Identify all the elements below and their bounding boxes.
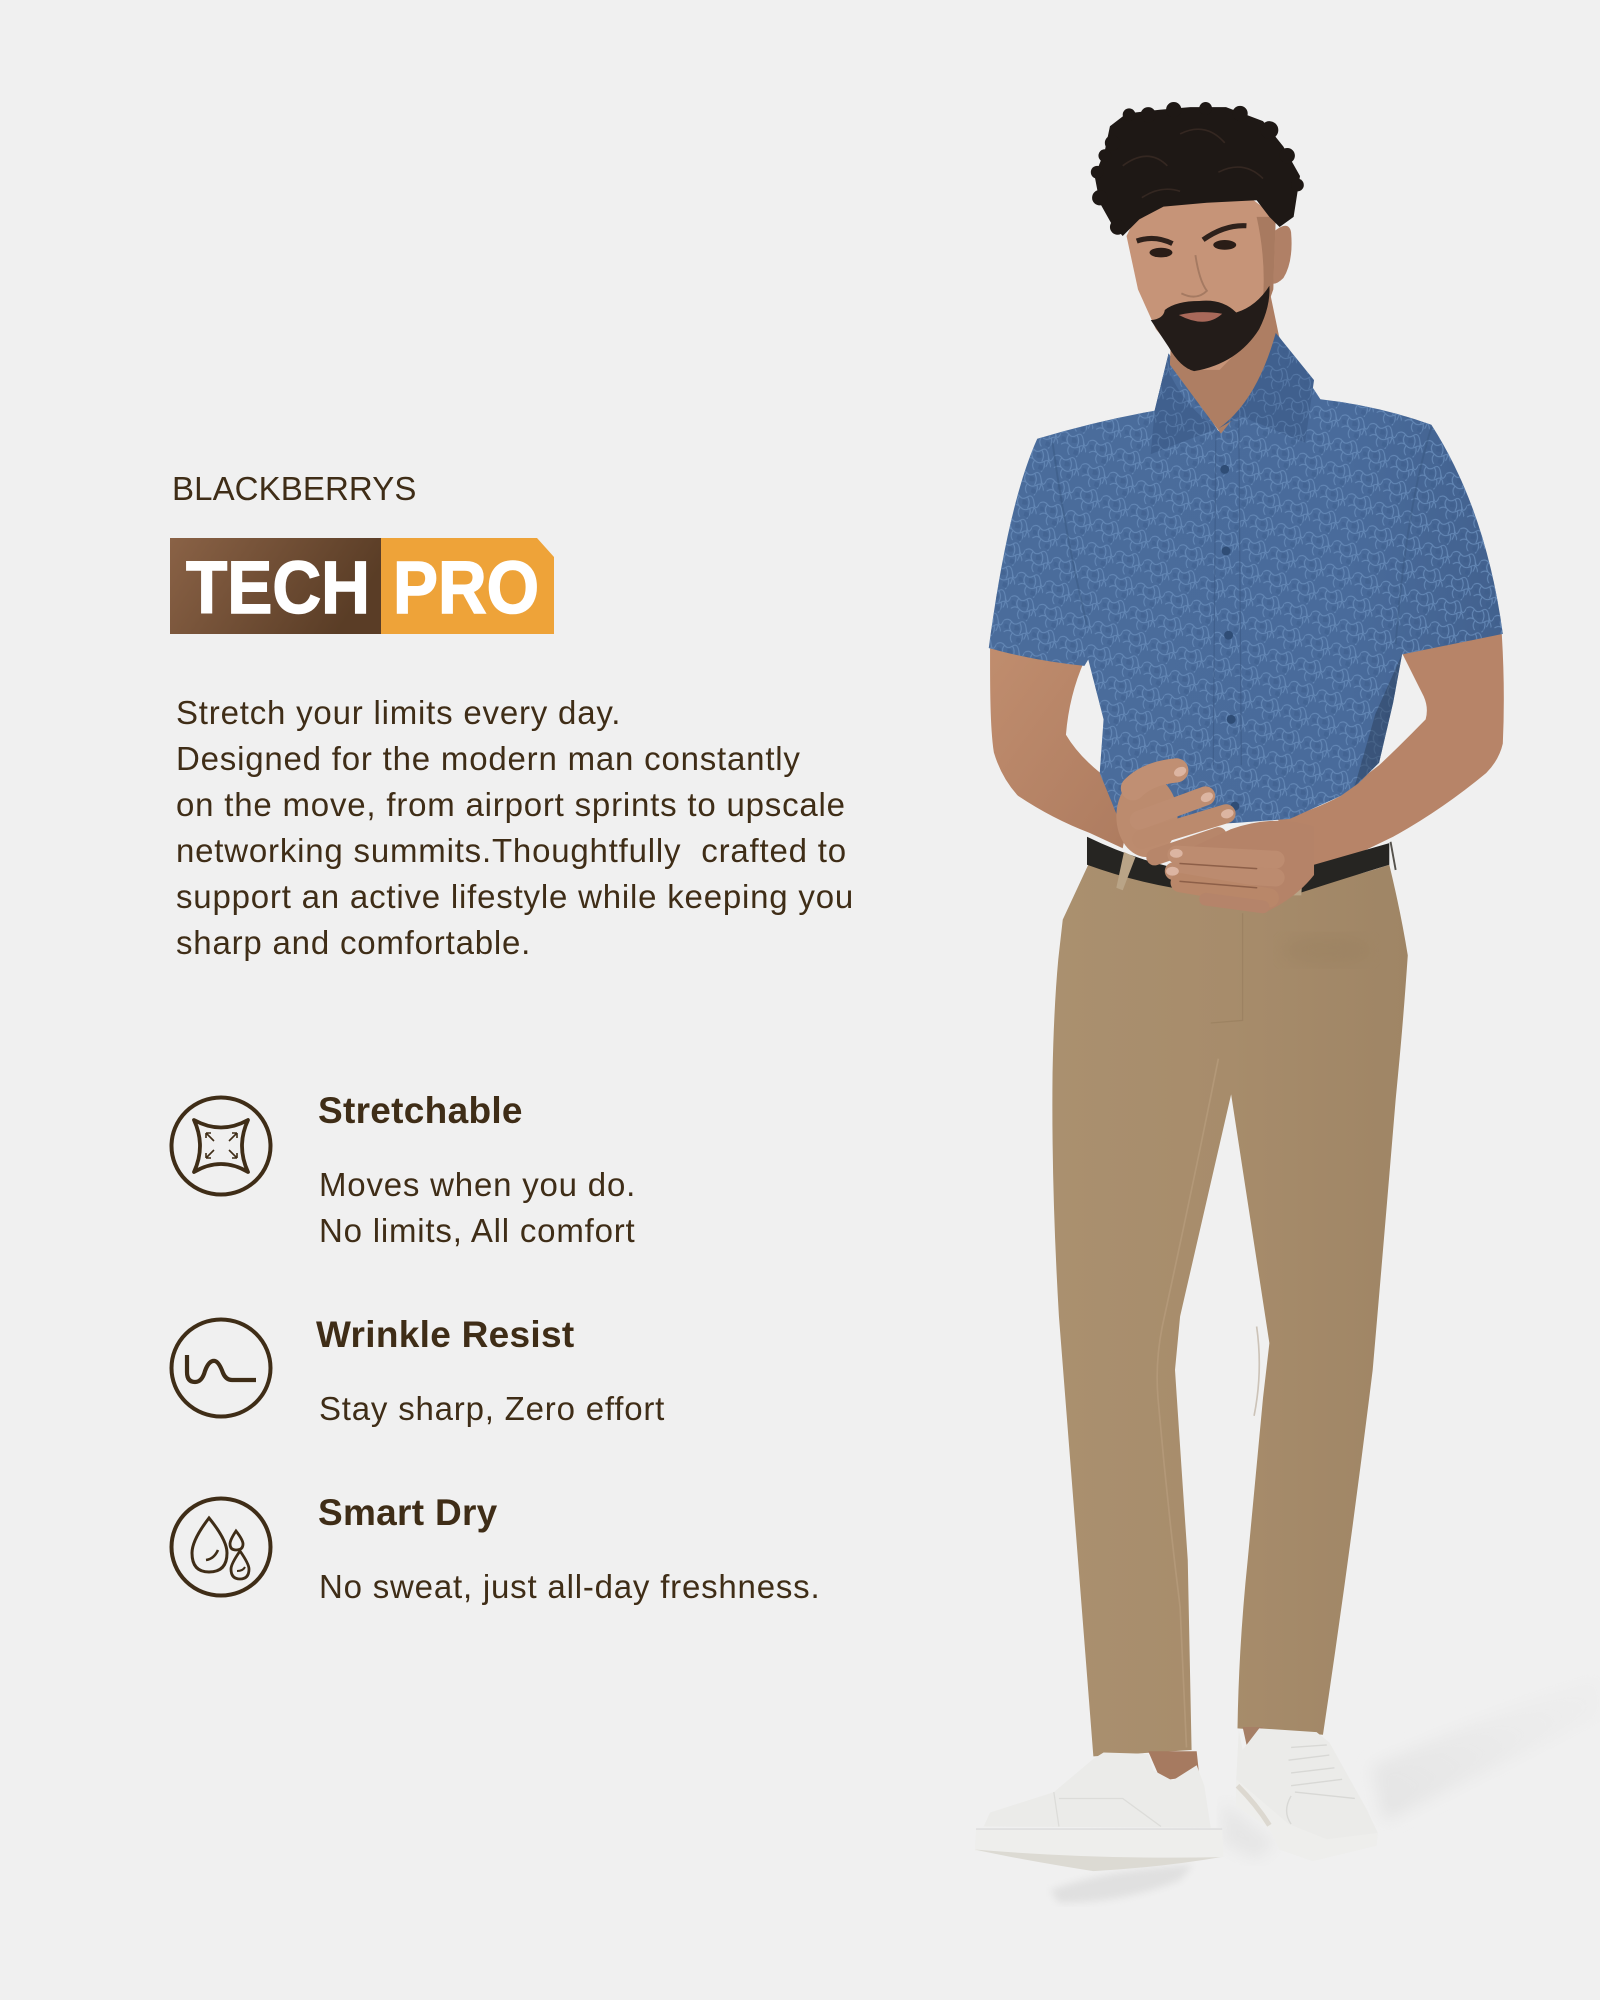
left arm (990, 644, 1135, 848)
shirt (989, 335, 1503, 829)
hair (1091, 102, 1304, 236)
right shoe (1236, 1727, 1378, 1861)
intro paragraph (176, 694, 854, 961)
left shoe (975, 1751, 1223, 1871)
intro paragraph: Designed for the modern man constantly (176, 740, 801, 777)
feature heading: Stretchable: Stretchable (318, 1090, 523, 1131)
icon: smart dry (170, 1496, 272, 1598)
head (1091, 102, 1304, 371)
belt (1087, 837, 1396, 895)
feature text: Stretchable: Moves when you do. (319, 1166, 636, 1203)
feature heading: Smart Dry: Smart Dry (318, 1492, 498, 1533)
collar (1151, 333, 1314, 454)
side shadow (1355, 654, 1402, 786)
brand name: BLACKBERRYS (172, 470, 416, 507)
intro paragraph: sharp and comfortable. (176, 924, 531, 961)
feature text: Stretchable (319, 1166, 636, 1249)
icon: wrinkle resist (170, 1318, 272, 1418)
icon: stretchable (170, 1096, 272, 1196)
neck (1170, 296, 1283, 434)
Tech Pro logo (170, 538, 554, 634)
Tech Pro logo: PRO (393, 546, 539, 629)
brows and eyes (1137, 226, 1246, 244)
floor shadow (1050, 1676, 1600, 1903)
intro paragraph: Stretch your limits every day. (176, 694, 621, 731)
ear (1271, 226, 1292, 284)
intro paragraph: support an active lifestyle while keeping you (176, 878, 854, 915)
intro paragraph: on the move, from airport sprints to upscale (176, 786, 846, 823)
placket and buttons (1213, 416, 1241, 811)
left hand (1116, 765, 1235, 857)
Tech Pro logo: TECH (186, 546, 370, 629)
feature text: Stretchable: No limits, All comfort (319, 1212, 636, 1249)
right arm (1276, 630, 1504, 875)
sleeve seams (1053, 427, 1431, 644)
face (1127, 179, 1276, 370)
beard (1151, 286, 1270, 371)
feature text: Wrinkle Resist: Stay sharp, Zero effort (319, 1390, 665, 1427)
pants (1052, 865, 1408, 1756)
feature text: Smart Dry: No sweat, just all-day freshness. (319, 1568, 820, 1605)
right hand (1166, 821, 1314, 913)
fly and seams (1211, 913, 1243, 1023)
intro paragraph: networking summits.Thoughtfully crafted to (176, 832, 847, 869)
feature heading: Wrinkle Resist: Wrinkle Resist (316, 1314, 575, 1355)
